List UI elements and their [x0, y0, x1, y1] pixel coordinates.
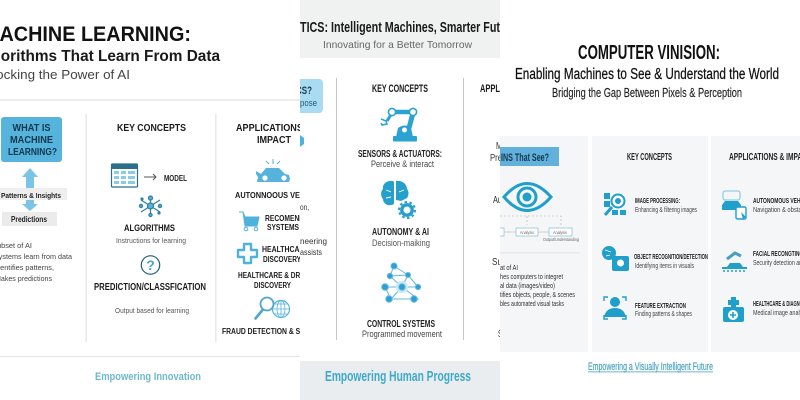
callout: what is machine learning: [1, 117, 62, 162]
concept: image processing: Enhancing & filtering images: [635, 207, 697, 214]
concept: prediction: PREDICTION/CLASSFICATION: [94, 282, 206, 293]
concept: control systems: CONTROL SYSTEMS: [367, 319, 435, 330]
icon: car: [256, 159, 290, 182]
text block: definition: tifies objects, people, & scenes: [500, 290, 575, 299]
icon: algorithms network: [139, 196, 162, 217]
icon: cart: [239, 212, 259, 231]
concept: feature extraction: [635, 301, 692, 318]
title: robotics: TICS: Intelligent Machines, Smarter Fut: [300, 19, 500, 36]
callout heading: [500, 147, 559, 166]
icon: industrial robot: [722, 253, 747, 271]
icon: feature extraction: [604, 297, 626, 319]
application: healthcare: HEALTHCARE & DRUG: [238, 271, 310, 280]
concept: prediction: [94, 282, 206, 315]
text block: definition: bles automated visual tasks: [500, 299, 564, 308]
box: predictions: [2, 212, 57, 226]
icon: data table to model: [112, 164, 187, 187]
footer band: [300, 361, 500, 400]
panel: robotics slide: [285, 0, 502, 400]
application: healthcare: HEALTHCARE &: [262, 245, 316, 254]
title: robotics: [300, 19, 500, 51]
panel: key concepts: [592, 136, 708, 352]
icon: brain and gears: [381, 181, 415, 218]
concept: autonomy and ai: AUTONOMY & AI: [372, 227, 429, 238]
heading: key concepts: KEY CONCEPTS: [372, 83, 428, 95]
application: recommender systems: RECOMENDATIONS: [265, 214, 330, 223]
arrow: down: [22, 200, 38, 211]
diagram: processing flow: [496, 216, 579, 242]
text block: definition: [500, 263, 575, 308]
icon fragment: [300, 135, 304, 147]
text block: fragments: neering: [300, 236, 327, 246]
box: patterns and insights: [0, 188, 67, 200]
text block: applications fragments: Pre: [490, 153, 502, 164]
panel: computer vision slide: [496, 0, 800, 400]
title: computer vision: [515, 42, 779, 100]
heading: KEY CONCEPTS: [627, 152, 672, 163]
callout: what is machine learning: LEARNING?: [8, 147, 57, 158]
application: healthcare: DISCOVERY: [263, 255, 302, 264]
concept: feature extraction: FEATURE EXTRACTION: [635, 301, 686, 310]
footer: empowering innovation: Empowering Innovation: [95, 371, 201, 383]
arrow: up: [22, 168, 38, 188]
text block: fragments: on,: [300, 202, 309, 212]
icon: health cross: [238, 244, 257, 263]
application: healthcare: [238, 246, 300, 288]
text block: applications fragments: Au: [493, 195, 502, 206]
icon: image processing: [604, 193, 626, 215]
concept: object recognition: [634, 252, 708, 270]
icon: magnifier and globe: [256, 298, 290, 318]
application: recommender systems: [265, 215, 300, 230]
heading: applications and impact: [236, 124, 300, 143]
diagram: processing flow: Analysis: [520, 230, 535, 235]
callout heading: INS That See?: [501, 152, 549, 164]
icon: data table to model: MODEL: [164, 173, 187, 183]
concept: object recognition: OBJECT RECOGNITION/DETECTION: [634, 252, 708, 261]
concept: sensors and actuators: [358, 150, 442, 167]
concept: image processing: [635, 196, 697, 214]
concept: algorithms: ALGORITHMS: [124, 223, 175, 234]
icon: eye: [504, 184, 551, 210]
concept: autonomy and ai: [372, 227, 430, 249]
callout: what is robotics: CS?: [296, 85, 312, 97]
title: robotics: Innovating for a Better Tomorrow: [323, 39, 472, 51]
callout: what is robotics: pose: [300, 98, 317, 108]
box: patterns and insights: Patterns & Insights: [1, 193, 61, 200]
footer: empowering visually intelligent future: Empowering a Visually Intelligent Future: [588, 361, 713, 373]
icon: question: ?: [146, 257, 155, 273]
concept: sensors and actuators: SENSORS & ACTUATORS:: [358, 149, 442, 160]
concept: image processing: IMAGE PROCESSING:: [635, 196, 680, 205]
text block: definition: al data (images/video): [500, 281, 555, 290]
panel: applications and impact: [711, 136, 800, 352]
icon: autonomous vehicle: [722, 191, 746, 219]
box: predictions: Predictions: [11, 215, 47, 224]
heading: applications and impact: IMPACT: [257, 135, 291, 146]
application: facial recognition: [753, 249, 800, 267]
title: computer vision: COMPUTER VINISION:: [578, 42, 720, 64]
panel: what is computer vision: [496, 136, 588, 352]
icon: robot arm: [381, 108, 417, 142]
icon: question: [141, 256, 160, 274]
text block: definition: [0, 241, 73, 283]
text block: fragments: assists: [300, 247, 322, 257]
text block: definition: hes computers to integret: [500, 272, 564, 281]
concept: sensors and actuators: Perceive & interact: [371, 159, 434, 170]
heading: applications and impact: APPLICATIONS &: [236, 123, 312, 134]
text block: fragments: [300, 206, 326, 255]
footer: empowering human progress: Empowering Human Progress: [325, 369, 471, 385]
diagram: processing flow: Analysis: [553, 230, 568, 235]
callout: what is machine learning: MACHINE: [10, 135, 53, 146]
text block: applications fragments: M: [496, 141, 502, 152]
concept: feature extraction: Finding patterns & shapes: [635, 311, 692, 318]
application: autonomous vehicles: [753, 196, 800, 214]
title: machine learning: [0, 23, 220, 82]
header band: [300, 0, 500, 58]
text block: applications fragments: S: [498, 329, 502, 340]
text block: definition: at of AI: [500, 263, 518, 272]
callout: what is robotics: [300, 79, 323, 113]
concept: algorithms: Instructions for learning: [116, 236, 186, 245]
application: healthcare and diagnostics: [753, 299, 800, 317]
diagram: processing flow: Output/Understanding: [543, 237, 579, 242]
application: fraud detection: FRAUD DETECTION & SECURITY: [222, 327, 331, 336]
footer: empowering visually intelligent future: [588, 361, 713, 373]
application: autonomous vehicles: AUTONNOOUS VEHICLES: [235, 191, 328, 200]
application: recommender systems: SYSTEMS: [267, 223, 300, 232]
concept: control systems: Programmed movement: [362, 329, 442, 340]
heading: applications: APPL: [480, 83, 500, 95]
panel: machine learning slide: [0, 26, 300, 382]
concept: autonomy and ai: Decision-maiking: [372, 238, 430, 249]
concept: prediction: Output based for learning: [115, 306, 189, 315]
icon: object recognition: [602, 246, 629, 271]
application: healthcare: DISCOVERY: [254, 281, 292, 290]
text block: applications fragments: Su: [492, 257, 502, 268]
text block: applications fragments: [490, 142, 500, 337]
concept: algorithms: [116, 223, 186, 245]
icon: medical kit: [723, 297, 744, 322]
concept: control systems: [362, 320, 442, 339]
callout: what is machine learning: WHAT IS: [12, 123, 51, 134]
icon: control network: [382, 263, 421, 302]
concept: object recognition: Identifying items in visuals: [635, 263, 694, 270]
heading: key concepts: KEY CONCEPTS: [117, 123, 186, 134]
